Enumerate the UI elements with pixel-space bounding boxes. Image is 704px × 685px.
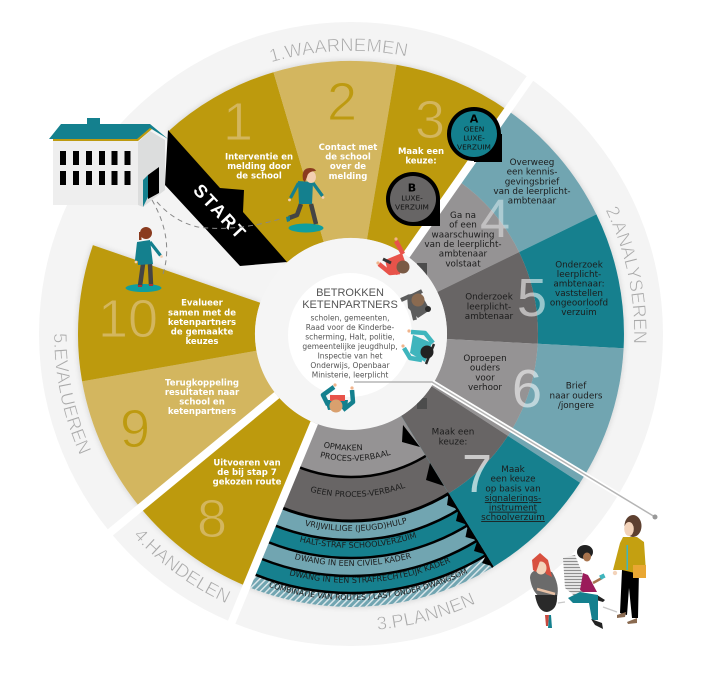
- top view person: teal: [401, 329, 434, 364]
- text step 5 outer: vaststellen: [555, 289, 603, 299]
- badge B: VERZUIM: [395, 202, 429, 212]
- text step 10: samen met de: [168, 308, 236, 318]
- number 4: 4: [480, 189, 510, 249]
- route: opmaken: OPMAKEN: [324, 442, 362, 450]
- route arrow heads: [402, 425, 494, 568]
- sitting girl: [530, 553, 558, 628]
- hub partners list: Inspectie van het: [318, 352, 382, 361]
- text step 4 outer: ambtenaar: [508, 197, 557, 207]
- number 6: 6: [512, 359, 542, 419]
- hub partners list: Ministerie, leerplicht: [312, 371, 388, 380]
- evaluator figure: [126, 227, 163, 292]
- text step 7 outer: signalerings-: [485, 494, 541, 504]
- number 1: 1: [223, 92, 253, 152]
- school building: [49, 118, 168, 207]
- text step 2: over de: [330, 162, 366, 172]
- text step 5 outer: ambtenaar:: [553, 280, 605, 290]
- ring label: analyseren: 2.ANALYSEREN: [606, 206, 646, 342]
- text step 7 outer: schoolverzuim: [481, 513, 545, 523]
- text step 1: de school: [236, 172, 282, 182]
- runner figure: [286, 168, 324, 232]
- text step 5 outer: ongeoorloofd: [550, 298, 608, 308]
- text step 4 inner: of een: [449, 221, 477, 231]
- text step 4 inner: van de leerplicht-: [424, 240, 502, 250]
- text step 4 outer: Overweeg: [510, 158, 554, 168]
- segment 9: [82, 351, 277, 508]
- route: geen proces-verbaal: GEEN PROCES-VERBAAL: [311, 483, 406, 497]
- text step 2: de school: [325, 153, 371, 163]
- sitting boy: [558, 545, 617, 629]
- ring label: handelen: 4.HANDELEN: [136, 532, 230, 602]
- text step 8: gekozen route: [213, 478, 282, 488]
- text step 6 inner: verhoor: [468, 383, 502, 393]
- number 5: 5: [517, 268, 547, 328]
- text step 8: de bij stap 7: [217, 468, 277, 478]
- hub partners list: scholen, gemeenten,: [311, 314, 389, 323]
- text step 7 outer: Maak: [501, 465, 526, 475]
- text step 5 outer: leerplicht-: [557, 270, 601, 280]
- number 3: 3: [415, 90, 445, 150]
- ring label: waarnemen: 1.WAARNEMEN: [270, 38, 408, 62]
- start arrow: [165, 130, 287, 266]
- text step 4 outer: gevingsbrief: [505, 177, 560, 187]
- hub partners list: scherming, Halt, politie,: [305, 333, 395, 342]
- dashed walking paths: [152, 200, 280, 277]
- segment 1: [168, 72, 324, 263]
- hub partners list: Onderwijs, Openbaar: [310, 361, 390, 370]
- text step 6 inner: Oproepen: [463, 354, 507, 364]
- route: strafrechtelijk kader: DWANG IN EEN STRAFRECHTELIJK KADER: [290, 558, 450, 583]
- segment 4 inner: [406, 181, 519, 292]
- text step 6 inner: ouders: [470, 364, 500, 374]
- text step 7 inner: keuze:: [439, 437, 467, 447]
- segment 10: [78, 245, 260, 381]
- text step 6 outer: naar ouders: [550, 391, 603, 401]
- hub text: [302, 287, 398, 380]
- text step 5 outer: verzuim: [561, 308, 597, 318]
- phase separators: [102, 70, 536, 632]
- badge B: LUXE-: [401, 194, 423, 202]
- text step 3: Maak een: [398, 147, 444, 157]
- text step 4 outer: een kennis-: [507, 168, 557, 178]
- text step 9: school en: [179, 398, 225, 408]
- text step 6 inner: voor: [475, 374, 495, 384]
- segment 5 outer: [519, 214, 624, 348]
- number 8: 8: [197, 489, 227, 549]
- big numbers: [98, 72, 547, 549]
- hub partners list: gemeentelijke jeugdhulp,: [302, 342, 398, 351]
- segment 5 inner: [437, 252, 538, 344]
- number 9: 9: [120, 399, 150, 459]
- standing woman: [613, 515, 646, 624]
- text step 9: Terugkoppeling: [165, 378, 239, 388]
- number 2: 2: [327, 72, 357, 132]
- top view person: grey: [401, 291, 431, 320]
- top view person: book: [323, 383, 354, 412]
- number 7: 7: [462, 444, 492, 504]
- text step 2: Contact met: [319, 143, 377, 153]
- text step 4 outer: van de leerplicht-: [493, 187, 571, 197]
- routes fan: [250, 416, 494, 610]
- start arrow: START: [189, 180, 251, 244]
- text step 6 outer: /jongere: [558, 401, 594, 411]
- badge B: [386, 172, 440, 226]
- leader line: [354, 382, 658, 520]
- text step 2: melding: [329, 172, 367, 182]
- route labels: [270, 442, 468, 600]
- text step 1: Interventie en: [225, 152, 293, 162]
- badge A: GEEN: [464, 124, 484, 134]
- text step 4 inner: Ga na: [450, 211, 476, 221]
- badge A: VERZUIM: [457, 142, 491, 152]
- top view person: red: [376, 237, 410, 275]
- badge A: A: [470, 112, 479, 126]
- text step 1: melding door: [227, 162, 292, 172]
- segment 8: [140, 395, 314, 586]
- wheel segments: [78, 61, 624, 607]
- text step 7 outer: een keuze: [490, 475, 536, 485]
- text step 5 inner: leerplicht-: [467, 302, 511, 312]
- hub partners list: Raad voor de Kinderbe-: [306, 323, 395, 332]
- text step 5 inner: ambtenaar: [465, 312, 514, 322]
- badge A: LUXE-: [463, 134, 485, 142]
- text step 10: keuzes: [185, 337, 219, 347]
- text step 3: keuze:: [405, 156, 437, 166]
- hub: [255, 238, 447, 430]
- ring label: plannen: 3.PLANNEN: [377, 592, 474, 630]
- text step 4 inner: waarschuwing: [432, 230, 494, 240]
- text step 7 outer: instrument: [489, 504, 538, 514]
- segment 4 outer: [458, 110, 596, 252]
- text step 4 inner: volstaat: [445, 259, 481, 269]
- segment 7 inner: [401, 386, 508, 493]
- text step 7 outer: op basis van: [485, 484, 541, 494]
- hub heading: KETENPARTNERS: [302, 299, 398, 311]
- route: proces-verbaal: PROCES-VERBAAL: [320, 450, 391, 462]
- segment 6 outer: [508, 344, 624, 483]
- text step 5 inner: Onderzoek: [465, 293, 514, 303]
- segment 7 outer: [449, 436, 580, 567]
- badge B: B: [408, 182, 416, 194]
- route: combinatie: COMBINATIE VAN ROUTES / LAST ONDER DWANGSOM: [270, 568, 468, 600]
- text step 6 outer: Brief: [566, 382, 587, 392]
- badge A: [447, 107, 502, 162]
- hub heading: BETROKKEN: [316, 287, 384, 299]
- text step 9: resultaten naar: [165, 388, 240, 398]
- segment 6 inner: [432, 339, 538, 436]
- shadow blocks: [417, 263, 427, 409]
- text step 8: Uitvoeren van: [213, 458, 281, 468]
- text step 5 outer: Onderzoek: [555, 260, 604, 270]
- text step 7 inner: Maak een: [432, 428, 474, 438]
- text step 9: ketenpartners: [168, 407, 236, 417]
- segment 3: [367, 65, 508, 255]
- number 10: 10: [98, 289, 158, 349]
- text step 10: de gemaakte: [171, 328, 233, 338]
- segment 2: [274, 61, 396, 242]
- route: halt-straf: HALT-STRAF SCHOOLVERZUIM: [300, 532, 416, 548]
- route: vrijwillige hulp: VRIJWILLIGE (JEUGD)HULP: [306, 518, 406, 532]
- text step 10: ketenpartners: [168, 318, 236, 328]
- people group: [530, 515, 646, 629]
- route: civiel kader: DWANG IN EEN CIVIEL KADER: [295, 553, 412, 566]
- text step 10: Evalueer: [181, 299, 224, 309]
- hub inner circle: [288, 273, 412, 397]
- ring label: evalueren: 5.EVALUEREN: [54, 334, 91, 454]
- text step 4 inner: ambtenaar: [439, 250, 488, 260]
